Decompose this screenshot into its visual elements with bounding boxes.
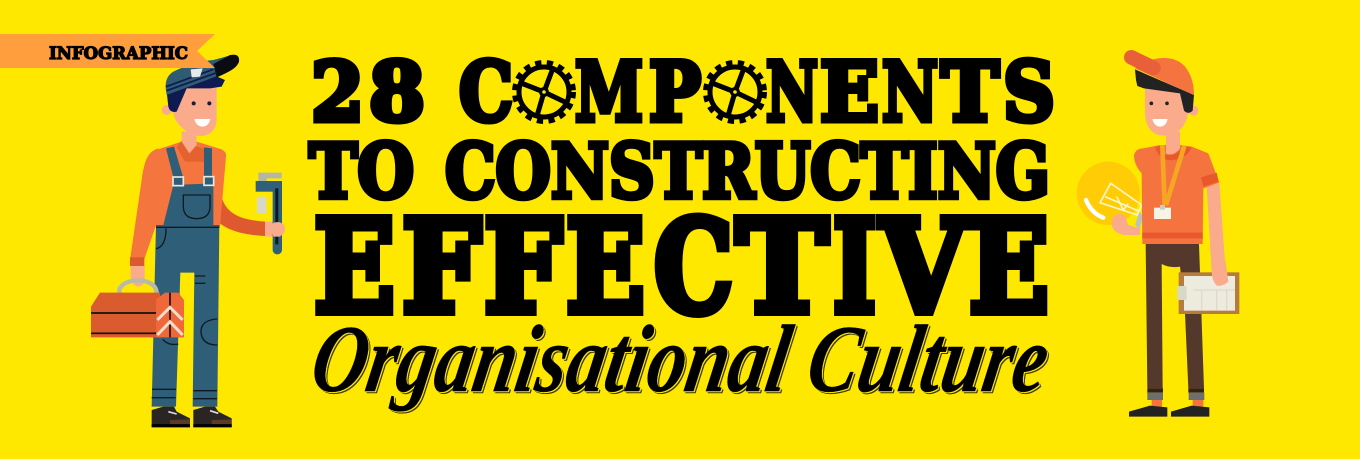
- lanyard and badge: [1162, 145, 1184, 205]
- cap: [1135, 58, 1194, 95]
- left arm: [130, 148, 158, 260]
- cap: [166, 55, 239, 95]
- title line 1: 28 Components: S: [1003, 46, 1055, 140]
- title line 1: 28 Components: E: [820, 46, 879, 140]
- title line 2: to constructing: TO: [309, 128, 414, 216]
- title line 3: effective: I: [833, 192, 876, 342]
- title line 3: effective: V: [879, 192, 968, 342]
- title line 3: effective: E: [566, 192, 645, 342]
- banner: infographic ribbon: [0, 34, 215, 68]
- character: office worker with bulb and clipboard: [1077, 57, 1239, 417]
- title line 1: 28 Components: T: [941, 46, 999, 140]
- title line 1: 28 Components: P: [649, 46, 701, 140]
- wrench: [258, 173, 282, 183]
- title: [304, 46, 1057, 412]
- right arm: [1207, 183, 1227, 286]
- title line 1: 28 Components: 2: [311, 46, 364, 140]
- title line 3: effective: E: [969, 192, 1049, 342]
- title line 3: effective: [314, 192, 1049, 342]
- title line 2: to constructing: CONSTRUCTING: [445, 128, 1050, 216]
- title line 1: 28 Components: M: [575, 46, 643, 140]
- hair: [1135, 69, 1194, 113]
- icon: gear as letter O: [516, 64, 572, 120]
- overalls: [163, 183, 213, 225]
- arm holding bulb: [1112, 214, 1140, 235]
- shoes: [152, 407, 190, 427]
- title line 3: effective: C: [654, 192, 733, 342]
- light bulb: [1077, 162, 1140, 225]
- title line 3: effective: E: [314, 192, 395, 342]
- banner label: INFOGRAPHIC: [49, 44, 188, 64]
- icon: gear as letter O: [707, 64, 763, 120]
- title line 1: 28 Components: [311, 46, 1055, 140]
- hair: [167, 75, 225, 112]
- title line 4: organisational culture script: Culture: [800, 306, 1057, 412]
- title line 3: effective: F: [484, 192, 562, 342]
- legs and shoes: [1147, 388, 1204, 393]
- trousers: [1146, 244, 1204, 388]
- title line 4: organisational culture script: Organisational: [304, 306, 799, 412]
- shirt: [1134, 145, 1219, 244]
- toolbox: [119, 280, 157, 293]
- title line 1: 28 Components: N: [766, 46, 818, 140]
- title line 1: 28 Components: N: [882, 46, 938, 140]
- character: plumber: [91, 55, 285, 427]
- clipboard: [1179, 272, 1239, 314]
- cap brim: [1131, 57, 1153, 68]
- title line 3: effective: T: [736, 192, 828, 342]
- shirt: [156, 142, 226, 227]
- neck and face: [1166, 132, 1180, 154]
- title line 3: effective: F: [402, 192, 481, 342]
- right arm: [217, 190, 265, 236]
- title line 1: 28 Components: C: [459, 46, 513, 140]
- title line 1: 28 Components: 8: [369, 46, 425, 140]
- neck and face: [182, 132, 197, 153]
